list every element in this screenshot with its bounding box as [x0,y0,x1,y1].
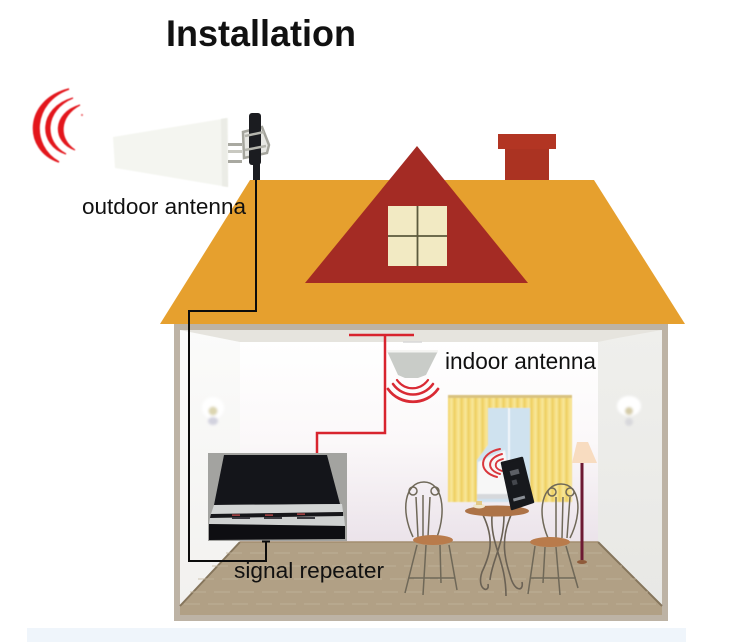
bottom strip [27,628,686,642]
back wall [240,342,598,542]
indoor antenna [387,342,438,378]
house walls [174,322,668,621]
floor lamp [572,442,597,564]
ceiling band [180,330,662,342]
floor [180,542,662,615]
right side wall [598,330,662,606]
outdoor antenna [113,113,269,187]
label: indoor antenna: indoor antenna [445,348,596,374]
label: outdoor antenna: outdoor antenna [82,194,247,219]
gable window [388,206,447,266]
wall sconce left [202,397,224,425]
wall sconce right [617,396,641,426]
label: signal repeater: signal repeater [234,558,384,583]
phone signal waves [483,449,503,477]
chimney [498,134,556,182]
title: Installation [166,13,356,54]
signal repeater [208,453,347,541]
roof gable [305,146,528,283]
table [465,501,529,596]
right chair [528,484,578,595]
phone [502,458,533,509]
icon: indoor signal waves [388,380,438,402]
left chair [405,482,457,595]
left side wall [180,330,240,606]
curtains and window [448,395,572,502]
roof [160,180,685,324]
red cable [317,335,414,453]
icon: outdoor signal waves [33,89,83,162]
black cable [189,180,270,561]
